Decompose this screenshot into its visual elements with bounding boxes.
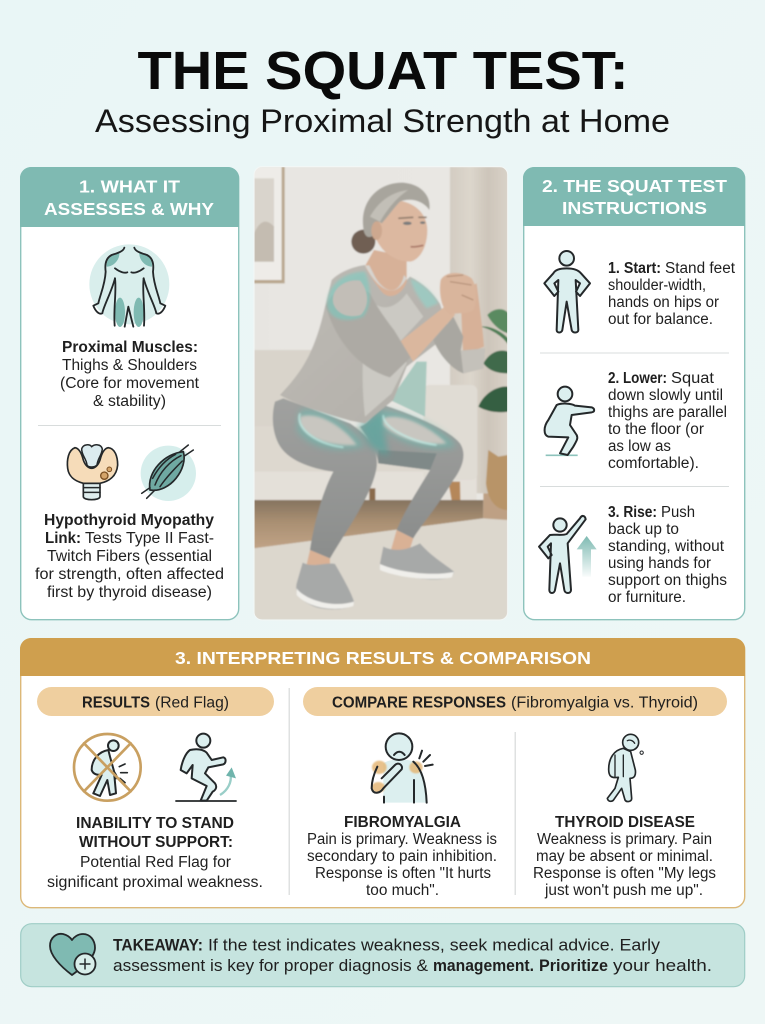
text: thyroid disease: THYROID DISEASE [555, 814, 695, 831]
subtitle: Assessing Proximal Strength at Home [95, 103, 670, 139]
woman: near forearm and hands [400, 305, 455, 362]
title [95, 41, 670, 139]
step 1 text: out for balance. [608, 311, 713, 328]
text: fibromyalgia: Pain is primary. Weakness is [307, 831, 497, 848]
panel: squat test instructions [523, 167, 745, 620]
icon: prohibited struggling figure [74, 734, 141, 801]
takeaway text: TAKEAWAY: [113, 936, 203, 954]
text: fibromyalgia: FIBROMYALGIA [344, 814, 461, 831]
framed picture [254, 167, 286, 284]
woman: ankles [306, 550, 330, 566]
icon: thyroid disease figure [607, 734, 643, 802]
photo: woman squatting in living room [250, 167, 508, 620]
panel: takeaway [21, 924, 745, 987]
icon: figure pushing up [175, 734, 237, 801]
text: hypothyroid myopathy link: Hypothyroid Myopathy [44, 512, 214, 529]
panel header: 2. THE SQUAT TEST [542, 176, 727, 196]
takeaway text: assessment is key for proper diagnosis & [113, 956, 429, 975]
step 2 text: to the floor (or [608, 421, 704, 438]
takeaway text: If the test indicates weakness, seek medical advice. Early [208, 936, 661, 954]
woman: shoes [296, 563, 354, 609]
text: thyroid disease: may be absent or minimal. [536, 848, 713, 865]
text: proximal muscles: Proximal Muscles: [62, 339, 198, 356]
floor [254, 500, 483, 548]
step 3 text [608, 504, 727, 606]
title: THE SQUAT TEST: [138, 41, 628, 101]
icon: thyroid gland [67, 445, 118, 500]
compare pill [303, 687, 727, 716]
panel header: INSTRUCTIONS [562, 198, 707, 218]
rug [254, 518, 508, 620]
woman: back leg [360, 405, 463, 538]
sofa [254, 350, 477, 514]
compare pill: COMPARE RESPONSES [332, 694, 506, 712]
takeaway text: your health. [613, 956, 712, 975]
text: inability to stand [47, 815, 263, 891]
step 3 text: 3. Rise: [608, 504, 657, 521]
text: thyroid disease: Response is often "My legs [533, 865, 716, 882]
teal glow on shoulders [327, 272, 438, 320]
icon: squatting figure [545, 387, 594, 455]
panel header [20, 167, 239, 227]
woman: front leg [273, 398, 377, 558]
panel header: 3. INTERPRETING RESULTS & COMPARISON [175, 648, 591, 668]
step 2 text: thighs are parallel [608, 404, 727, 421]
text: inability to stand: Potential Red Flag for [80, 854, 231, 871]
plant [478, 309, 508, 412]
results pill: (Red Flag) [155, 694, 229, 712]
results pill [37, 687, 274, 716]
step 3 text: using hands for [608, 555, 711, 572]
text: thyroid disease: just won't push me up". [544, 882, 703, 899]
text: fibromyalgia: too much". [366, 882, 439, 899]
results pill: RESULTS [82, 694, 150, 712]
step 2 text: comfortable). [608, 455, 699, 472]
text: thyroid disease [533, 814, 716, 899]
text: hypothyroid myopathy link: Tests Type II Fast- [85, 530, 214, 547]
panel header [523, 167, 745, 226]
step 3 text: Push [661, 504, 695, 521]
step 2 text: 2. Lower: [608, 370, 667, 387]
icon: body with proximal muscles [89, 244, 169, 327]
curtain [450, 167, 508, 493]
panel header: 1. WHAT IT [79, 176, 180, 196]
text: fibromyalgia: secondary to pain inhibition. [307, 848, 497, 865]
woman: neck [365, 250, 407, 296]
text: proximal muscles: (Core for movement [60, 375, 200, 392]
step 2 text: as low as [608, 438, 671, 455]
basket [486, 450, 508, 510]
text: fibromyalgia: Response is often "It hurts [315, 865, 491, 882]
panel header [20, 638, 745, 676]
teal glow on thighs [297, 408, 457, 457]
takeaway text: Prioritize [539, 956, 608, 975]
text: hypothyroid myopathy link: Link: [45, 530, 81, 547]
panel: interpreting results and comparison [20, 638, 745, 908]
step 3 text: support on thighs [608, 572, 727, 589]
takeaway text: management. [433, 956, 534, 975]
text: hypothyroid myopathy link [35, 512, 224, 601]
step 1 text [608, 260, 736, 328]
icon: standing figure [544, 251, 590, 332]
text: hypothyroid myopathy link: first by thyroid disease) [47, 584, 212, 601]
text: thyroid disease: Weakness is primary. Pain [537, 831, 712, 848]
icon: muscle fibers [141, 445, 196, 501]
text: inability to stand: WITHOUT SUPPORT: [79, 834, 233, 851]
step 3 text: or furniture. [608, 589, 686, 606]
woman: torso [280, 265, 450, 423]
icon: rising figure with arrow [539, 516, 597, 593]
text: proximal muscles [60, 339, 200, 410]
step 1 text: Stand feet [665, 260, 736, 277]
compare pill: (Fibromyalgia vs. Thyroid) [511, 694, 698, 712]
woman: head [351, 183, 430, 262]
icon: fibromyalgia figure [372, 733, 433, 803]
step 2 text: down slowly until [608, 387, 723, 404]
step 1 text: 1. Start: [608, 260, 661, 277]
step 3 text: standing, without [608, 538, 725, 555]
takeaway text [113, 936, 712, 975]
text: hypothyroid myopathy link: Twitch Fibers (essential [47, 548, 212, 565]
text: proximal muscles: Thighs & Shoulders [62, 357, 197, 374]
text: proximal muscles: & stability) [93, 393, 166, 410]
step 1 text: shoulder-width, [608, 277, 706, 294]
text: hypothyroid myopathy link: for strength, often affected [35, 566, 224, 583]
text: inability to stand: INABILITY TO STAND [76, 815, 234, 832]
icon: heart with plus [50, 934, 96, 975]
panel: what it assesses and why [20, 167, 239, 620]
step 1 text: hands on hips or [608, 294, 719, 311]
step 2 text: Squat [671, 370, 715, 387]
woman: near sleeve [326, 288, 411, 377]
step 2 text [608, 370, 727, 472]
text: fibromyalgia [307, 814, 497, 899]
text: inability to stand: significant proximal weakness. [47, 874, 263, 891]
panel header: ASSESSES & WHY [44, 199, 214, 219]
woman: far arm [460, 283, 484, 355]
step 3 text: back up to [608, 521, 679, 538]
